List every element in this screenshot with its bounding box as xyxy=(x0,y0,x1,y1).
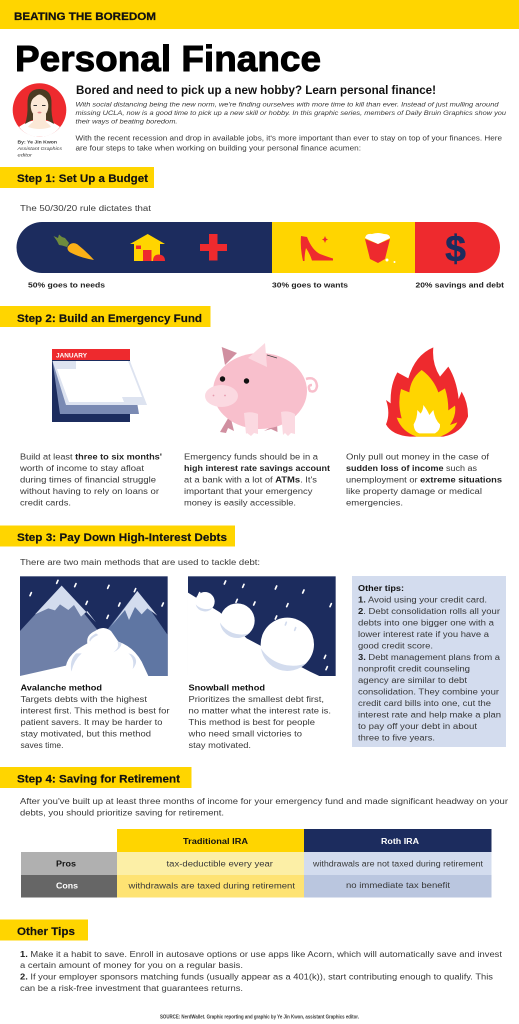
text: emergency fund column 2: money is easily accessible. xyxy=(184,498,296,508)
heading: step 3 xyxy=(0,526,235,546)
title: Personal Finance xyxy=(15,38,321,79)
text: other tips list: 1. Make it a habit to save. Enroll in autosave options or use apps like Acorn, which will automatically save and invest xyxy=(20,950,503,959)
panel: other tips: 3. Debt management plans from a xyxy=(358,653,501,662)
header banner xyxy=(0,0,519,29)
text: emergency fund column 3 xyxy=(346,452,503,508)
panel: other tips: 1. Avoid using your credit card. xyxy=(358,596,487,604)
panel: other tips: debts into one bigger one with a xyxy=(358,618,495,628)
IRA comparison table: tax-deductible every year xyxy=(166,860,273,868)
text: emergency fund column 2 xyxy=(184,452,330,508)
IRA comparison table: Pros xyxy=(56,860,77,868)
text: emergency fund column 1: Build at least three to six months' xyxy=(20,452,162,462)
text: other tips list: 2. If your employer sponsors matching funds (usually appear as a 401(k)), start contributing enough to qualify. This xyxy=(20,972,493,982)
panel: other tips: good credit score. xyxy=(358,642,433,650)
byline: editor xyxy=(18,152,33,158)
byline: By: Ye Jin Kwon xyxy=(18,140,57,144)
text: emergency fund column 3: like property damage or medical xyxy=(346,487,482,496)
text: snowball method: no matter what the interest rate is. xyxy=(188,706,331,716)
heading: other tips: Other Tips xyxy=(17,926,75,938)
text: other tips list: can be a risk-free investment that guarantees returns. xyxy=(20,984,243,993)
heading: other tips xyxy=(0,920,88,940)
intro body text: With the recent recession and drop in available jobs, it's more important than ever to stay on top of your finances. Here xyxy=(76,134,502,142)
retirement intro text xyxy=(20,797,508,818)
byline: Assistant Graphics xyxy=(16,146,63,151)
text: emergency fund column 2: important that your emergency xyxy=(184,487,312,496)
intro italic text: missing UCLA, now is a good time to pick up a new skill or hobby. In this graphic series, members of Daily Bruin Graphics show you xyxy=(76,110,506,117)
text: emergency fund column 1: credit cards. xyxy=(20,498,71,508)
panel: other tips: 2. Debt consolidation rolls all your xyxy=(358,607,500,616)
text: emergency fund column 1: without having to rely on loans or xyxy=(19,487,159,496)
panel: other tips: agency are similar to debt xyxy=(358,676,468,685)
text: emergency fund column 1: during times of financial struggle xyxy=(20,476,157,484)
text: snowball method xyxy=(187,684,331,750)
text: emergency fund column 3: Only pull out money in the case of xyxy=(346,452,490,462)
icon: house xyxy=(130,234,165,261)
text: avalanche method: patient savers. It may be harder to xyxy=(20,718,163,727)
rule intro text: The 50/30/20 rule dictates that xyxy=(20,204,152,213)
budget bar xyxy=(16,222,500,273)
text: snowball method: Prioritizes the smallest debt first, xyxy=(188,695,324,704)
retirement intro text: debts, you should prioritize saving for retirement. xyxy=(20,808,224,818)
IRA comparison table: withdrawals are not taxed during retirement xyxy=(312,860,484,868)
panel: other tips: to pay off your debt in about xyxy=(358,722,478,731)
byline xyxy=(16,140,63,158)
icon: dollar sign: $ xyxy=(445,228,466,269)
text: emergency fund column 3: sudden loss of income such as xyxy=(346,464,477,473)
IRA comparison table: Roth IRA xyxy=(381,837,419,846)
text: emergency fund column 1: worth of income to stay afloat xyxy=(19,464,145,473)
IRA comparison table: no immediate tax benefit xyxy=(346,881,451,890)
IRA comparison table xyxy=(21,829,492,898)
panel: other tips: nonprofit credit counseling xyxy=(358,664,470,674)
text: snowball method: stay motivated. xyxy=(188,741,251,750)
text: emergency fund column 2: at a bank with a lot of ATMs . It's xyxy=(184,476,317,484)
heading: step 2: Step 2: Build an Emergency Fund xyxy=(17,313,202,325)
heading: step 2 xyxy=(0,306,210,327)
text: emergency fund column 3: unemployment or extreme situations xyxy=(346,476,503,484)
panel: other tips: lower interest rate if you have a xyxy=(358,630,490,639)
illustration: avalanche xyxy=(20,576,168,676)
icon: author portrait xyxy=(13,83,66,137)
heading: step 4: Step 4: Saving for Retirement xyxy=(17,774,180,786)
IRA comparison table: Traditional IRA xyxy=(183,837,248,846)
text: emergency fund column 2: high interest rate savings account xyxy=(184,464,330,473)
icon: popcorn xyxy=(365,233,396,263)
budget labels: 50% goes to needs xyxy=(28,280,105,290)
retirement intro text: After you've built up at least three months of income for your emergency fund and made significant headway on your xyxy=(20,797,508,806)
text: avalanche method: interest first. This method is best for xyxy=(20,706,170,716)
heading: step 3: Step 3: Pay Down High-Interest Debts xyxy=(17,532,227,544)
panel: other tips: Other tips: xyxy=(358,584,404,593)
text: emergency fund column 3: emergencies. xyxy=(346,498,403,508)
intro italic text xyxy=(76,102,506,126)
icon: high heel xyxy=(301,236,333,261)
panel: other tips: interest rate and help make a plan xyxy=(358,710,501,720)
debt intro text: There are two main methods that are used to tackle debt: xyxy=(20,558,260,567)
text: other tips list xyxy=(20,950,503,993)
icon: carrot xyxy=(54,234,94,260)
IRA comparison table: withdrawals are taxed during retirement xyxy=(127,882,296,890)
text: snowball method: Snowball method xyxy=(188,684,265,692)
intro body text xyxy=(76,134,502,152)
icon: calendar: JANUARY xyxy=(56,354,87,360)
text: avalanche method: Avalanche method xyxy=(20,684,102,692)
source credit: SOURCE: NerdWallet. Graphic reporting and graphic by Ye Jin Kwon, assistant Graphics editor. xyxy=(160,1014,360,1020)
icon: piggy bank xyxy=(205,343,317,436)
icon: medical cross xyxy=(200,234,227,260)
text: snowball method: who need small victories to xyxy=(187,730,303,738)
icon: flame xyxy=(386,347,468,437)
intro italic text: With social distancing being the new norm, we're finding ourselves with more time to kill than ever. Instead of just mulling around xyxy=(76,102,499,108)
heading: step 1: Step 1: Set Up a Budget xyxy=(17,173,148,185)
text: other tips list: a certain amount of money for you on a regular basis. xyxy=(20,961,243,970)
illustration: snowball xyxy=(188,576,336,676)
budget labels: 30% goes to wants xyxy=(272,280,348,290)
IRA comparison table: Cons xyxy=(56,882,79,890)
heading: step 4 xyxy=(0,767,192,788)
panel: other tips: consolidation. They combine your xyxy=(358,688,499,696)
text: avalanche method: stay motivated, but this method xyxy=(20,730,151,738)
heading: step 1 xyxy=(0,167,154,188)
budget labels: 20% savings and debt xyxy=(416,280,505,290)
text: avalanche method: Targets debts with the highest xyxy=(20,695,148,704)
header banner: BEATING THE BOREDOM xyxy=(14,11,156,23)
text: avalanche method: saves time. xyxy=(20,741,64,750)
text: snowball method: This method is best for people xyxy=(188,718,316,727)
subheading: Bored and need to pick up a new hobby? Learn personal finance! xyxy=(76,85,436,97)
text: emergency fund column 1 xyxy=(19,452,162,508)
budget labels xyxy=(28,280,505,290)
panel: other tips xyxy=(352,576,506,747)
intro body text: are four steps to take when working on building your personal finance acumen: xyxy=(76,144,361,152)
icon: calendar xyxy=(52,349,147,422)
panel: other tips: three to five years. xyxy=(358,734,435,742)
text: avalanche method xyxy=(20,684,170,750)
intro italic text: their ways of beating boredom. xyxy=(76,118,178,126)
panel: other tips: credit card bills into one, cut the xyxy=(358,699,492,708)
text: emergency fund column 2: Emergency funds should be in a xyxy=(184,452,319,462)
